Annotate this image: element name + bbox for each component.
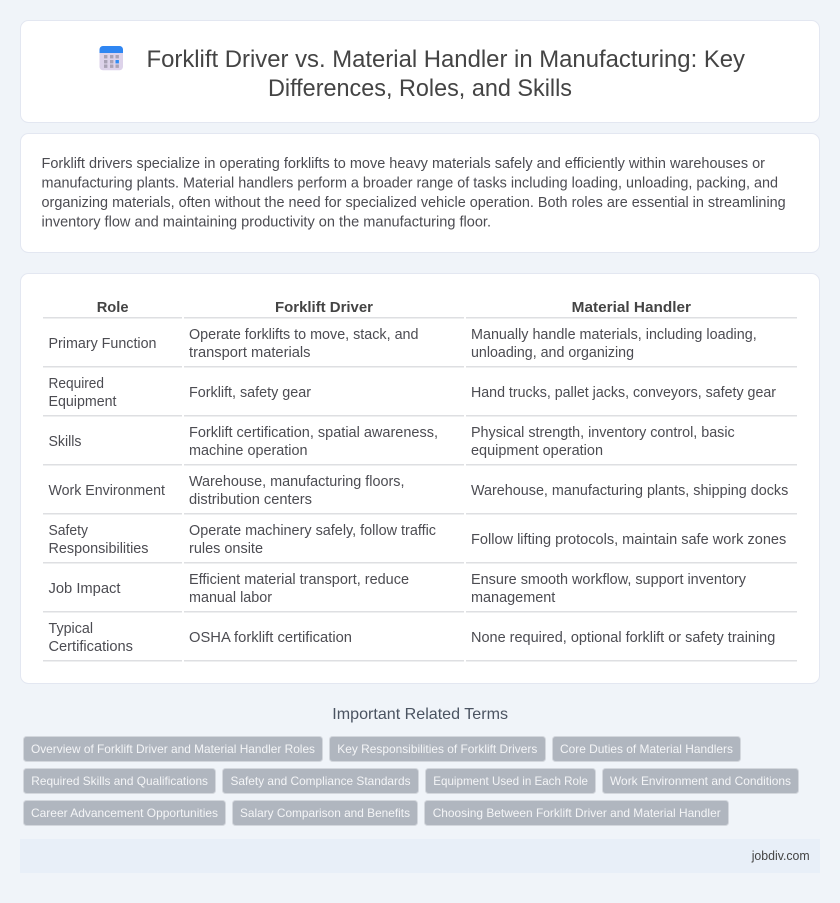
- row: safety responsibilities: [48, 523, 786, 557]
- row: job impact: management: [471, 590, 555, 606]
- row: typical certifications: [48, 621, 775, 655]
- intro paragraph: Forklift drivers specialize in operating forklifts to move heavy materials safely and efficiently within warehouses or: [42, 156, 765, 172]
- footer site name: jobdiv.com: [751, 849, 810, 863]
- row: work environment: Warehouse, manufacturing floors,: [189, 474, 404, 490]
- row: skills: Physical strength, inventory control, basic: [471, 425, 735, 441]
- title: [146, 46, 745, 102]
- heading: important related terms: Important Related Terms: [332, 706, 508, 723]
- row: job impact: manual labor: [189, 590, 272, 606]
- row: job impact: Efficient material transport, reduce: [189, 572, 409, 588]
- row: required equipment: Equipment: [48, 394, 116, 410]
- row: safety responsibilities: Operate machinery safely, follow traffic: [189, 523, 436, 539]
- tag: overview: [24, 736, 322, 762]
- tag: career advancement: Career Advancement Opportunities: [31, 806, 218, 820]
- table header row: Role: [97, 299, 128, 316]
- tag: core duties: Core Duties of Material Handlers: [560, 742, 733, 756]
- row: typical certifications: OSHA forklift certification: [189, 630, 352, 646]
- tag: salary comparison: Salary Comparison and Benefits: [240, 806, 410, 820]
- row: skills: [48, 425, 735, 459]
- tag: core duties: [552, 736, 740, 762]
- row: safety responsibilities: Responsibilities: [48, 541, 148, 557]
- row: work environment: [48, 474, 788, 508]
- row: primary function: Primary Function: [48, 336, 156, 352]
- intro paragraph: [42, 156, 786, 230]
- row: typical certifications: None required, optional forklift or safety training: [471, 630, 775, 646]
- panel: comparison table: [20, 274, 820, 684]
- row: job impact: Ensure smooth workflow, support inventory: [471, 572, 747, 588]
- row: primary function: transport materials: [189, 345, 310, 361]
- footer band: [20, 839, 820, 873]
- row: required equipment: [48, 376, 776, 410]
- tag: safety and compliance: [222, 768, 418, 794]
- tag: work environment: Work Environment and Conditions: [610, 774, 791, 788]
- row: work environment: Work Environment: [48, 483, 165, 499]
- icon: calendar: [100, 46, 123, 70]
- panel: introduction: [20, 134, 820, 252]
- panel: title header: [20, 20, 820, 122]
- row: required equipment: Required: [48, 376, 104, 392]
- row: primary function: Operate forklifts to move, stack, and: [189, 327, 418, 343]
- row: work environment: Warehouse, manufacturing plants, shipping docks: [471, 483, 788, 499]
- tag: equipment: Equipment Used in Each Role: [433, 774, 588, 788]
- tag: overview: Overview of Forklift Driver and Material Handler Roles: [31, 742, 315, 756]
- tag: choosing between: [424, 800, 728, 826]
- table header row: [97, 299, 691, 316]
- tag: required skills: Required Skills and Qualifications: [31, 774, 208, 788]
- row: skills: machine operation: [189, 443, 308, 459]
- row: typical certifications: Typical: [48, 621, 93, 637]
- row: safety responsibilities: Follow lifting protocols, maintain safe work zones: [471, 532, 786, 548]
- row: job impact: [48, 572, 747, 606]
- row: skills: Skills: [48, 434, 82, 450]
- row: primary function: Manually handle materials, including loading,: [471, 327, 757, 343]
- intro paragraph: organizing materials, often without the need for specialized vehicle operation. Both roles are essential in streamlining: [42, 195, 786, 211]
- title: Differences, Roles, and Skills: [268, 75, 572, 102]
- tag: required skills: [24, 768, 216, 794]
- row: primary function: unloading, and organizing: [471, 345, 634, 361]
- row: skills: Forklift certification, spatial awareness,: [189, 425, 438, 441]
- tag: salary comparison: [232, 800, 418, 826]
- table header row: Material Handler: [572, 299, 691, 316]
- intro paragraph: inventory flow and maintaining productivity on the manufacturing floor.: [42, 214, 491, 230]
- tag: safety and compliance: Safety and Compliance Standards: [230, 774, 410, 788]
- table header row: Forklift Driver: [275, 299, 373, 316]
- row: work environment: distribution centers: [189, 492, 312, 508]
- intro paragraph: manufacturing plants. Material handlers perform a broader range of tasks including loading, unloading, packing, and: [42, 176, 778, 192]
- row: safety responsibilities: Safety: [48, 523, 89, 539]
- row: primary function: [48, 327, 757, 361]
- row: required equipment: Hand trucks, pallet jacks, conveyors, safety gear: [471, 385, 776, 401]
- row: typical certifications: Certifications: [48, 639, 133, 655]
- title: Forklift Driver vs. Material Handler in Manufacturing: Key: [146, 46, 745, 73]
- tag: key responsibilities: [330, 736, 546, 762]
- tag: career advancement: [24, 800, 226, 826]
- tag: work environment: [602, 768, 798, 794]
- tag: equipment: [426, 768, 596, 794]
- row: job impact: Job Impact: [48, 581, 120, 597]
- row: skills: equipment operation: [471, 443, 603, 459]
- row: required equipment: Forklift, safety gear: [189, 385, 311, 401]
- row: safety responsibilities: rules onsite: [189, 541, 263, 557]
- tag: choosing between: Choosing Between Forklift Driver and Material Handler: [433, 806, 721, 820]
- related term tags: [24, 736, 798, 826]
- tag: key responsibilities: Key Responsibilities of Forklift Drivers: [337, 742, 537, 756]
